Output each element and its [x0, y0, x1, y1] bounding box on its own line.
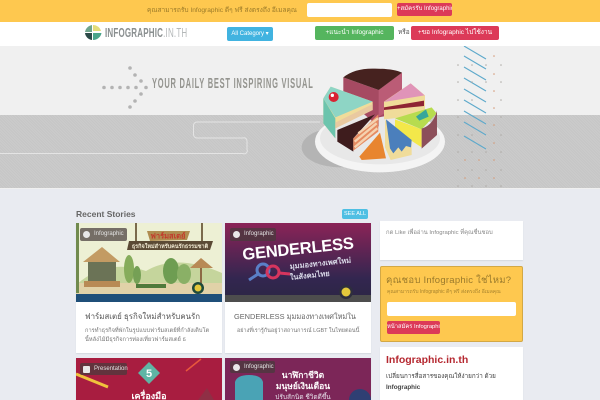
plate — [315, 111, 445, 172]
signup email input — [307, 3, 392, 17]
hero tagline: YOUR DAILY BEST INSPIRING VISUAL — [152, 75, 314, 92]
navigation bar — [0, 22, 600, 46]
submit infographic button — [315, 26, 394, 40]
category dropdown button: All Category ▾ — [231, 31, 269, 37]
farm stay illustration: ธุรกิจใหม่สำหรับคนรักธรรมชาติ — [132, 242, 209, 250]
recent stories heading: Recent Stories — [76, 209, 136, 219]
card description: การทำธุรกิจที่พักในรูปแบบฟาร์มสเตย์ที่กำลังเติบโต — [85, 328, 209, 334]
logo mark — [85, 25, 102, 40]
lime slice — [395, 107, 437, 149]
top signup bar — [0, 0, 600, 22]
category badge — [80, 363, 127, 375]
category badge: Infographic — [244, 231, 274, 237]
like prompt text: กด Like เพื่ออ่าน Infographic ที่คุณชื่นชอบ — [386, 230, 493, 236]
about text — [386, 372, 496, 391]
signup button — [397, 3, 452, 16]
blue diagonal stripes — [464, 46, 486, 149]
logo — [85, 25, 187, 40]
genderless illustration — [225, 223, 371, 302]
salary life illustration: มนุษย์เงินเดือน — [276, 381, 330, 392]
card title: ฟาร์มสเตย์ ธุรกิจใหม่สำหรับคนรัก — [85, 312, 200, 321]
category badge — [80, 228, 127, 241]
submit infographic button: +แนะนำ Infographic — [326, 29, 383, 36]
hero grey band — [0, 115, 600, 188]
farm stay illustration: ฟาร์มสเตย์ — [151, 232, 185, 240]
dotted arrow — [102, 66, 148, 109]
dark chocolate slice — [337, 114, 378, 152]
sidebar: subscribe box — [380, 266, 523, 342]
cake illustration — [302, 69, 445, 172]
hero banner — [0, 46, 600, 189]
story card: genderless — [225, 223, 371, 353]
genderless illustration: มุมมองทางเพศใหม่ — [289, 256, 352, 271]
card description — [85, 326, 209, 342]
five tools illustration — [76, 358, 214, 400]
category badge: Infographic — [94, 231, 124, 237]
story card: salary life — [225, 358, 371, 400]
subscribe email input — [387, 302, 516, 316]
genderless illustration: ในสังคมไทย — [289, 268, 330, 282]
card description: นี้หลังไม้มีธุรกิจการท่องเที่ยวฟาร์มสเตย์ ธ — [85, 336, 186, 342]
pink slice — [384, 83, 425, 119]
mint slice — [323, 87, 373, 138]
genderless illustration: GENDERLESS — [242, 234, 355, 264]
category dropdown button — [227, 27, 273, 41]
story card: five tools — [76, 358, 222, 400]
subscribe button — [387, 321, 440, 334]
category badge — [230, 228, 276, 241]
card description: อย่างที่เรารู้กันอยู่ว่าสถานการณ์ LGBT ในไทยตอนนี้ — [237, 328, 359, 334]
about text: เปลี่ยนการสื่อสารของคุณให้ง่ายกว่า ด้วย — [386, 373, 496, 380]
plate shadow — [302, 127, 378, 167]
or label: หรือ — [398, 29, 410, 36]
outline track on grey band — [0, 122, 320, 154]
subscribe heading: คุณชอบ Infographic ใช่ไหม? — [386, 275, 511, 286]
logo wordmark: INFOGRAPHIC.IN.TH — [105, 26, 187, 40]
see all button: SEE ALL — [344, 211, 366, 217]
story card: farm stay — [76, 223, 222, 353]
card title: GENDERLESS มุมมองทางเพศใหม่ใน — [234, 312, 356, 321]
hero decoration graphic — [0, 46, 502, 187]
five tools illustration: 5 — [146, 368, 152, 380]
category badge: Infographic — [244, 364, 274, 370]
sidebar: about box — [380, 347, 523, 400]
request infographic button — [411, 26, 499, 40]
signup prompt text: คุณสามารถรับ Infographic ดีๆ ฟรี ส่งตรงถึง อีเมลคุณ — [147, 7, 297, 14]
blue slice — [385, 119, 412, 160]
about text: Infographic — [386, 384, 420, 391]
salary life illustration: นาฬิกาชีวิต — [282, 370, 325, 380]
farm stay illustration — [76, 223, 222, 302]
category badge — [230, 361, 275, 373]
orange slice — [359, 133, 386, 160]
request infographic button: +ขอ Infographic ไปใช้งาน — [418, 29, 492, 36]
chocolate slice — [343, 69, 402, 127]
salary life illustration — [235, 370, 371, 400]
category badge: Presentation — [94, 366, 128, 372]
about heading: Infographic.in.th — [386, 354, 468, 366]
see all button — [342, 209, 368, 219]
sidebar: facebook like box — [380, 221, 523, 260]
subscribe subtext: คุณสามารถรับ Infographic ดีๆ ฟรี ส่งตรงถึง อีเมลคุณ — [387, 289, 501, 295]
small scattered dots — [457, 55, 502, 187]
